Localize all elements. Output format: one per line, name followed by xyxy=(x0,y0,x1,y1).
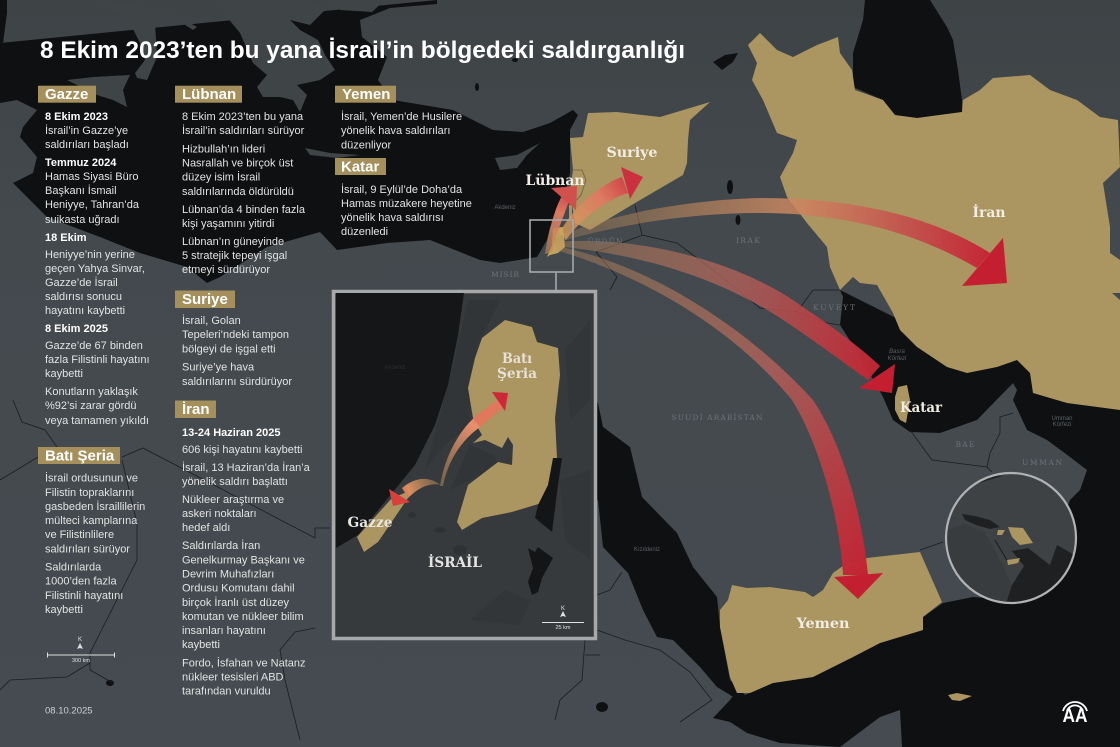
text: Batı Şeria facts: mülteci kamplarına xyxy=(45,515,138,527)
text: Gazze timeline: 8 Ekim 2025 xyxy=(45,323,108,335)
map: Yemen territory xyxy=(720,552,942,693)
text: Gazze timeline: fazla Filistinli hayatını xyxy=(45,354,150,366)
arrow: to Gaza xyxy=(389,479,443,506)
text: Katar facts: Hamas müzakere heyetine xyxy=(341,198,472,210)
text: Batı Şeria facts: Filistinli hayatını xyxy=(45,590,123,602)
text: Batı Şeria facts: Saldırılarda xyxy=(45,562,102,574)
text: İran facts: tarafından vuruldu xyxy=(182,686,271,698)
map: country labels xyxy=(491,145,1073,632)
tag: İran xyxy=(175,400,216,418)
text: Suriye facts: Suriye’ye hava xyxy=(182,362,255,374)
map: country labels: KUVEYT xyxy=(813,303,855,312)
text: İran facts xyxy=(182,427,311,698)
main map scale bar: K xyxy=(78,637,82,643)
text: Batı Şeria facts: gasbeden İsraillilerin xyxy=(45,500,145,513)
text: İran facts: 606 kişi hayatını kaybetti xyxy=(182,444,302,456)
tag: Batı Şeria: Batı Şeria xyxy=(45,448,115,464)
panel: İran xyxy=(175,400,311,698)
icon: AA logo: AA xyxy=(1062,706,1088,727)
map: country labels: Basra xyxy=(889,349,905,355)
inset: labels: Gazze xyxy=(348,515,393,531)
text: Yemen facts: yönelik hava saldırıları xyxy=(341,125,450,137)
text: Gazze timeline: Başkanı İsmail xyxy=(45,184,117,197)
date: 08.10.2025 xyxy=(45,706,93,716)
text: Lübnan facts: Lübnan’da 4 binden fazla xyxy=(182,204,306,216)
text: Gazze timeline: hayatını kaybetti xyxy=(45,305,125,317)
text: Suriye facts: bölgeyi de işgal etti xyxy=(182,344,276,356)
map: country labels: BAE xyxy=(956,440,974,449)
text: İran facts: Ordusu Komutanı dahil xyxy=(182,582,295,594)
text: Batı Şeria facts: ve Filistinlilere xyxy=(45,529,114,541)
text: Gazze timeline: 8 Ekim 2023 xyxy=(45,111,108,123)
map: country labels: Körfezi xyxy=(888,356,907,362)
inset: Dead Sea xyxy=(528,458,562,595)
text: Lübnan facts: İsrail’in saldırıları sürüyor xyxy=(182,124,305,137)
inset: scale bar: K xyxy=(561,606,565,612)
text: Gazze timeline: 18 Ekim xyxy=(45,232,87,244)
map: land over the sea (Italy, Sicily, Greece, islands) xyxy=(67,0,540,170)
inset: labels: İSRAİL xyxy=(428,552,482,571)
inset: darker terrain texture xyxy=(409,512,466,555)
inset: Mediterranean sea xyxy=(336,293,464,548)
text: Gazze timeline: İsrail’in Gazze’ye xyxy=(45,124,128,137)
text: Lübnan facts: saldırılarında öldürüldü xyxy=(182,186,294,198)
inset: West Bank territory xyxy=(457,320,560,530)
tag: Yemen: Yemen xyxy=(342,86,390,103)
text: Gazze timeline: Heniyye’nin yerine xyxy=(45,249,135,261)
text: Katar facts: yönelik hava saldırısı xyxy=(341,212,444,224)
map: small West Bank and Gaza xyxy=(547,227,565,257)
text: İran facts: nükleer tesisleri ABD xyxy=(182,672,284,684)
map: country labels: Umman xyxy=(1051,416,1073,422)
text: Gazze timeline: Heniyye, Tahran’da xyxy=(45,199,140,211)
text: Suriye facts xyxy=(182,314,292,388)
text: İran facts: Nükleer araştırma ve xyxy=(182,494,284,506)
text: İran facts: Fordo, İsfahan ve Natanz xyxy=(182,656,306,670)
tag: Lübnan: Lübnan xyxy=(182,86,236,103)
arrow: to West Bank xyxy=(440,392,508,486)
map: country labels: MISIR xyxy=(491,270,519,279)
map: country labels: SUUDİ ARABİSTAN xyxy=(672,413,763,422)
text: Katar facts xyxy=(341,183,472,238)
map: country labels: İran xyxy=(972,202,1006,221)
text: Gazze timeline: Gazze’de 67 binden xyxy=(45,340,143,352)
text: Gazze timeline: suikasta uğradı xyxy=(45,214,120,226)
text: Batı Şeria facts: saldırıları sürüyor xyxy=(45,544,130,556)
tag: İran: İran xyxy=(182,401,210,418)
map: lakes xyxy=(106,53,740,712)
text: Gazze timeline: Konutların yaklaşık xyxy=(45,386,138,398)
panel: Suriye xyxy=(175,290,292,388)
panel: inset map of Gaza and West Bank xyxy=(334,292,596,638)
text: Gazze timeline: Hamas Siyasi Büro xyxy=(45,171,139,183)
text: Gazze timeline: veya tamamen yıkıldı xyxy=(45,415,149,427)
text: Gazze timeline: kaybetti xyxy=(45,368,83,380)
inset: labels: Akdeniz xyxy=(384,365,406,371)
text: Yemen facts: düzenliyor xyxy=(341,140,391,152)
text: Batı Şeria facts: Filistin topraklarını xyxy=(45,487,134,499)
globe locator xyxy=(946,470,1080,610)
text: Katar facts: İsrail, 9 Eylül’de Doha’da xyxy=(341,183,463,196)
text: Gazze timeline: saldırısı sonucu xyxy=(45,291,122,303)
inset: labels: Batı xyxy=(502,351,532,367)
tag: Suriye: Suriye xyxy=(182,291,228,308)
inset: scale bar xyxy=(542,606,584,631)
text: İran facts: yönelik saldırı başlattı xyxy=(182,476,288,488)
map: country labels: Suriye xyxy=(606,145,658,161)
map: country labels: Kızıldeniz xyxy=(634,547,660,553)
text: Batı Şeria facts: İsrail ordusunun ve xyxy=(45,472,138,484)
inset: scale bar: 25 km xyxy=(556,625,571,631)
locator box and connector xyxy=(530,220,573,291)
inset: labels: Şeria xyxy=(497,366,537,382)
map: country labels: ÜRDÜN xyxy=(588,237,623,246)
text: İran facts: İsrail, 13 Haziran’da İran’a xyxy=(182,461,311,474)
text: Lübnan facts: Nasrallah ve birçok üst xyxy=(182,158,293,170)
text: İran facts: birçok İranlı üst düzey xyxy=(182,596,289,609)
text: İran facts: komutan ve nükleer bilim xyxy=(182,611,304,623)
inset: labels xyxy=(348,351,537,571)
text: Lübnan facts: kişi yaşamını yitirdi xyxy=(182,218,274,230)
text: İran facts: Devrim Muhafızları xyxy=(182,568,274,580)
map: country labels: Yemen xyxy=(795,616,850,632)
text: İran facts: askeri noktaları xyxy=(182,508,257,520)
text: Gazze timeline xyxy=(45,111,150,427)
panel: Yemen xyxy=(335,86,462,152)
text: Lübnan facts: 5 stratejik tepeyi işgal xyxy=(182,250,287,262)
text: Batı Şeria facts xyxy=(45,472,145,616)
text: Lübnan facts: düzey isim İsrail xyxy=(182,170,260,184)
text: İran facts: Genelkurmay Başkanı ve xyxy=(182,554,305,566)
main map scale bar xyxy=(47,637,115,664)
tag: Katar: Katar xyxy=(341,158,380,176)
text: Suriye facts: Tepeleri’ndeki tampon xyxy=(182,329,289,341)
map: country labels: Akdeniz xyxy=(494,205,516,211)
text: Lübnan facts: 8 Ekim 2023’ten bu yana xyxy=(182,111,304,123)
panel: Katar xyxy=(335,158,472,238)
map: country labels: Körfezi xyxy=(1053,422,1071,428)
panel: Gazze xyxy=(38,86,150,427)
panel: Batı Şeria xyxy=(38,447,145,616)
text: İran facts: insanları hayatını xyxy=(182,625,266,637)
map: country labels: Lübnan xyxy=(526,173,584,189)
text: Katar facts: düzenledi xyxy=(341,226,388,238)
text: Yemen facts: İsrail, Yemen’de Husilere xyxy=(341,110,462,123)
text: Batı Şeria facts: kaybetti xyxy=(45,604,83,616)
map: country labels: UMMAN xyxy=(1022,458,1062,467)
text: Batı Şeria facts: 1000’den fazla xyxy=(45,576,117,588)
arrow: to Syria xyxy=(560,167,643,240)
text: Suriye facts: saldırılarını sürdürüyor xyxy=(182,376,292,388)
map: Golan strip xyxy=(569,205,572,220)
text: Gazze timeline: Gazze’de İsrail xyxy=(45,276,118,289)
text: Gazze timeline: saldırıları başladı xyxy=(45,139,129,151)
text: Lübnan facts xyxy=(182,111,306,276)
arrow: to Lebanon xyxy=(545,186,577,254)
arrow: to Yemen xyxy=(556,246,883,599)
map: Syria and Lebanon territory xyxy=(568,102,710,230)
tag: Gazze: Gazze xyxy=(45,86,88,103)
text: Lübnan facts: Lübnan’ın güneyinde xyxy=(182,236,284,248)
text: İran facts: hedef aldı xyxy=(182,522,230,534)
map: country labels: Katar xyxy=(900,400,943,416)
map: Iran territory xyxy=(748,33,1120,410)
map: Qatar territory xyxy=(895,385,910,423)
map: country borders xyxy=(0,205,1013,740)
arrow: to Iran xyxy=(553,198,1007,286)
text: İran facts: Saldırılarda İran xyxy=(182,539,260,552)
map: Lebanon outline xyxy=(572,170,586,205)
text: Gazze timeline: %92’si zarar gördü xyxy=(45,400,137,412)
arrow: to Qatar xyxy=(555,241,895,393)
text: İran facts: 13-24 Haziran 2025 xyxy=(182,427,280,439)
main map scale bar: 300 km xyxy=(72,658,90,664)
panel: Lübnan xyxy=(175,86,306,276)
text: Lübnan facts: Hizbullah’ın lideri xyxy=(182,144,265,156)
text: Suriye facts: İsrail, Golan xyxy=(182,314,241,327)
text: Gazze timeline: geçen Yahya Sinvar, xyxy=(45,263,145,275)
text: Lübnan facts: etmeyi sürdürüyor xyxy=(182,264,270,276)
text: Gazze timeline: Temmuz 2024 xyxy=(45,157,117,169)
map: country labels: IRAK xyxy=(736,236,760,245)
inset: Gaza territory xyxy=(357,492,408,552)
text: Yemen facts xyxy=(341,110,462,152)
text: İran facts: kaybetti xyxy=(182,639,220,651)
map: Socotra island xyxy=(948,693,972,701)
title: 8 Ekim 2023’ten bu yana İsrail’in bölgedeki saldırganlığı xyxy=(40,37,685,64)
